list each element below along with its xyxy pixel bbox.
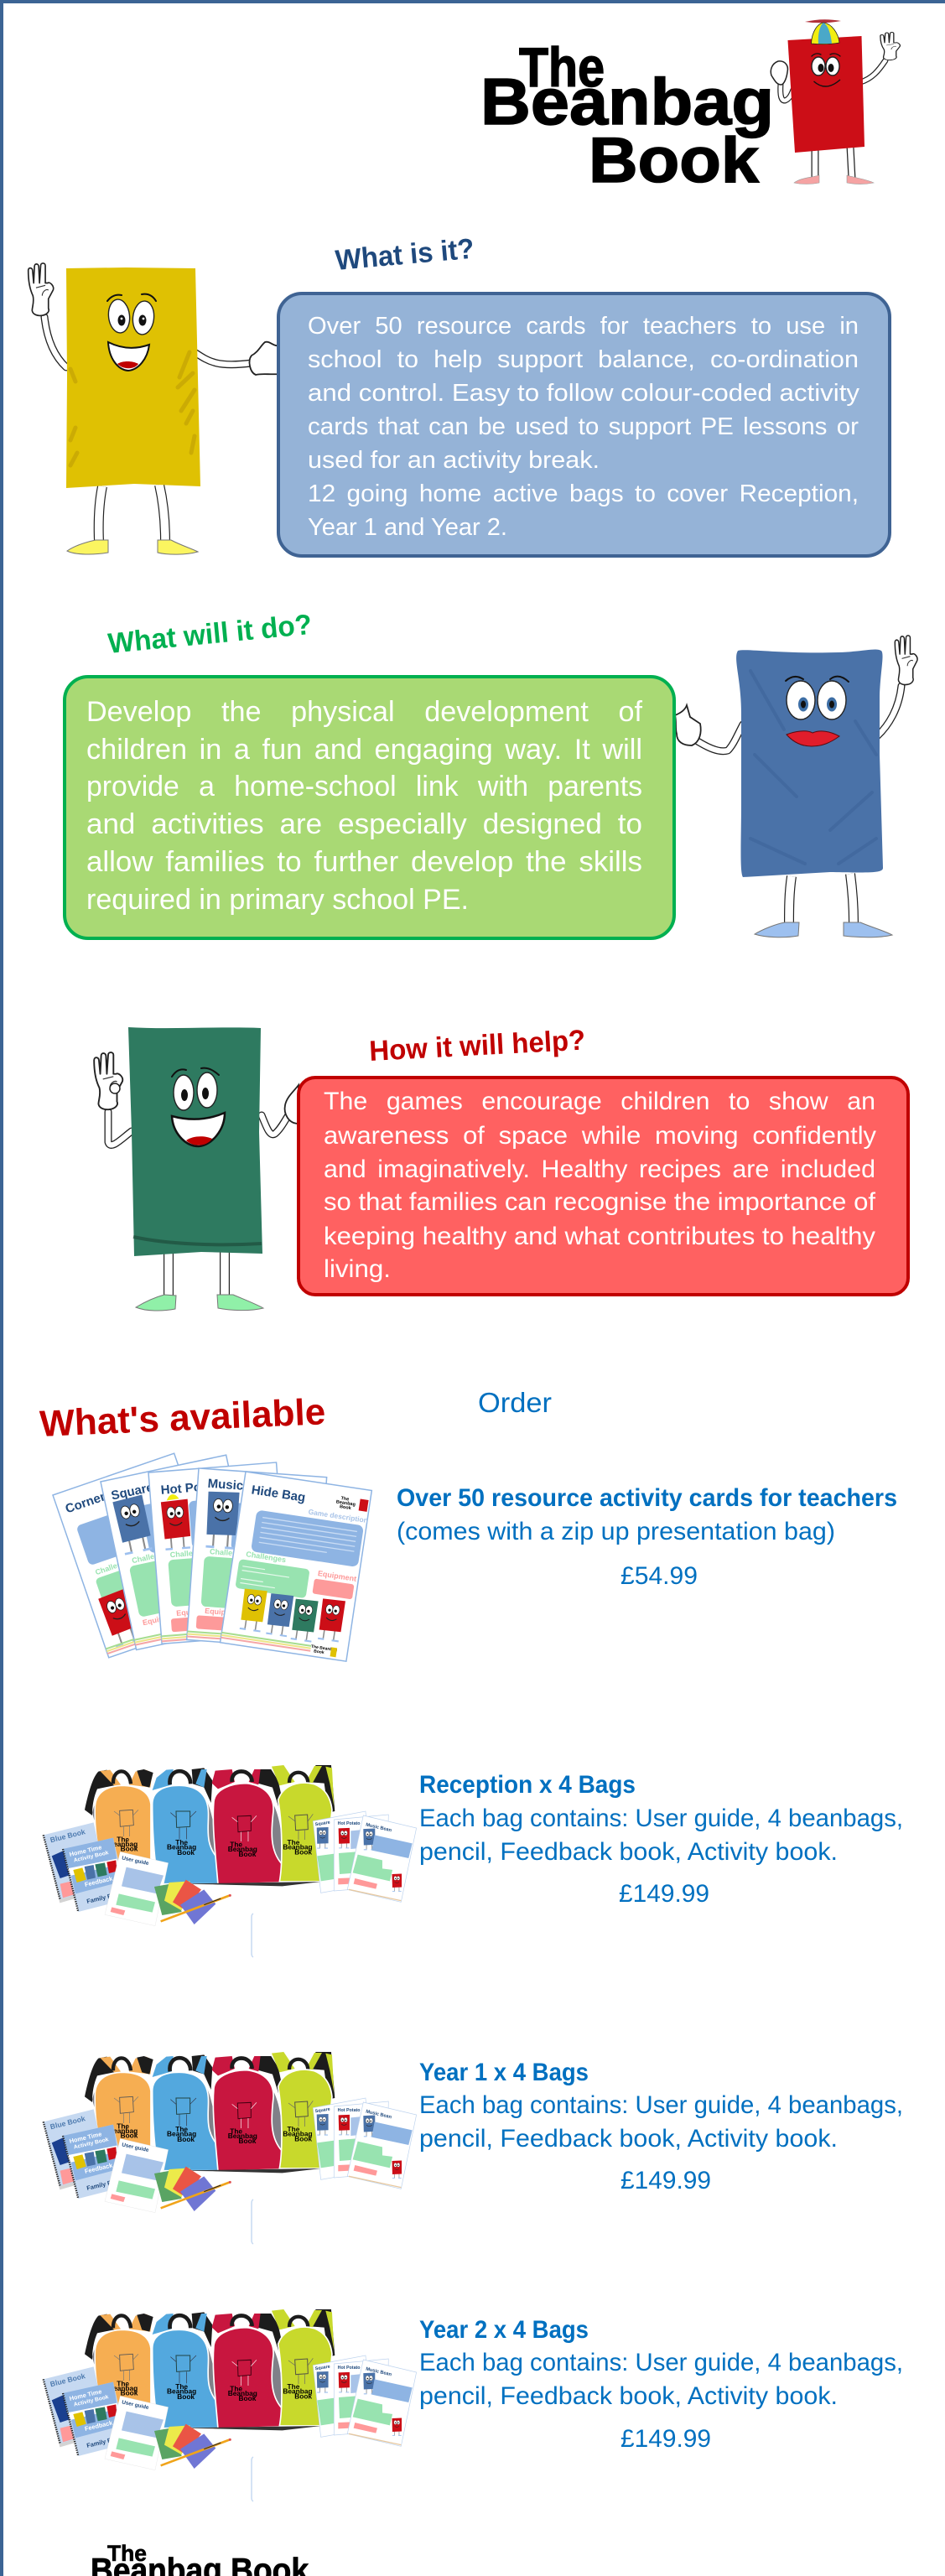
card: Square: Equipment	[142, 1611, 182, 1627]
text block: Year 2 bags: Year 2 x 4 Bags	[419, 2316, 589, 2344]
card: Corner: Challenges	[94, 1555, 135, 1576]
text block: Year 1 bags: Year 1 x 4 Bags	[419, 2059, 589, 2086]
text block: how it will help description: living.	[324, 1255, 391, 1283]
card: Hot Potato: Challenges	[169, 1548, 210, 1559]
text block: what is it description: Year 1 and Year 2.	[308, 514, 507, 541]
heading: What will it do?: What will it do?	[106, 609, 314, 660]
panel: how it will help	[299, 1078, 908, 1295]
illustration: Year 2 backpacks kit	[44, 2309, 417, 2470]
bracket mark	[252, 2457, 253, 2501]
text block: what is it description: Over 50 resource cards for teachers to use in	[308, 313, 859, 340]
panel: what is it	[278, 293, 890, 556]
card: Music: Equipment	[205, 1607, 244, 1618]
icon: red beanbag mascot with propeller hat	[771, 19, 900, 184]
heading: What is it?: What is it?	[334, 233, 475, 277]
illustration: Year 1 backpacks kit	[44, 2052, 417, 2213]
text block: what will it do description: Develop the physical development of	[86, 696, 643, 728]
logo: The Beanbag Book with red mascot	[480, 19, 900, 196]
logo wordmark: Beanbag	[480, 65, 774, 138]
card: Hide Bag: Challenges	[246, 1550, 287, 1564]
card: Music: Challenges	[210, 1547, 250, 1558]
text block: Reception bags: £149.99	[619, 1880, 709, 1908]
text block: what is it description: and control. Easy to follow colour-coded activity	[308, 380, 860, 407]
icon: blue beanbag character	[675, 636, 917, 937]
card: Hide Bag: Book	[340, 1504, 352, 1511]
footer logo: The Beanbag Book: The	[107, 2541, 147, 2566]
text block: Year 2 bags: Each bag contains: User guide, 4 beanbags,	[419, 2349, 903, 2376]
text block: how it will help description: so that families can recognise the importance of	[324, 1188, 876, 1216]
card: Hide Bag: The Beanbag	[311, 1644, 337, 1653]
text block: resource cards: Over 50 resource activity cards for teachers	[397, 1484, 897, 1512]
text block: what is it description: 12 going home active bags to cover Reception,	[308, 480, 859, 507]
card: Hide Bag: The	[340, 1496, 350, 1503]
text block: Reception bags: pencil, Feedback book, Activity book.	[419, 1838, 838, 1866]
text block: Year 1 bags: £149.99	[620, 2167, 711, 2194]
illustration: fan of activity cards	[53, 1453, 372, 1661]
icon: yellow beanbag character	[29, 263, 280, 554]
text block: resource cards	[397, 1484, 897, 1590]
text block: Reception bags: Reception x 4 Bags	[419, 1771, 636, 1799]
text block: what will it do description: provide a home-school link with parents	[86, 771, 642, 802]
logo wordmark	[480, 36, 774, 196]
panel: what will it do	[65, 677, 674, 938]
text block: resource cards: (comes with a zip up presentation bag)	[397, 1518, 835, 1545]
card: Hide Bag: Hide Bag	[251, 1483, 306, 1505]
card: Hot Potato	[148, 1462, 290, 1644]
text block: what will it do description	[86, 696, 643, 916]
footer logo: The Beanbag Book	[91, 2541, 309, 2576]
text block: Year 2 bags	[419, 2316, 903, 2453]
card: Hide Bag: Book	[314, 1649, 325, 1655]
card: Square: Challenges	[131, 1548, 172, 1565]
link: Order: Order	[478, 1387, 552, 1418]
text block: how it will help description	[324, 1088, 876, 1283]
logo wordmark: The	[519, 36, 605, 98]
text block: what will it do description: and activities are especially designed to	[86, 808, 642, 840]
logo wordmark: Book	[589, 125, 760, 196]
card: Hot Potato: Equipment	[176, 1606, 215, 1618]
card: Hide Bag: Game description	[308, 1508, 369, 1524]
icon: green beanbag character	[94, 1027, 299, 1311]
bracket mark	[252, 1914, 253, 1957]
text block: what is it description	[308, 313, 860, 541]
text block: what is it description: school to help support balance, co-ordination	[308, 346, 859, 373]
text block: what will it do description: allow families to further develop the skills	[86, 846, 642, 878]
text block: Reception bags: Each bag contains: User guide, 4 beanbags,	[419, 1805, 903, 1832]
text block: Year 2 bags: pencil, Feedback book, Activity book.	[419, 2382, 838, 2410]
text block: how it will help description: The games encourage children to show an	[324, 1088, 875, 1115]
text block: what is it description: used for an activity break.	[308, 447, 600, 474]
heading: How it will help?: How it will help?	[368, 1025, 586, 1067]
card: Music: Music Bean	[207, 1477, 278, 1496]
text block: Year 1 bags	[419, 2059, 903, 2194]
card: Square	[101, 1455, 262, 1650]
text block: Year 1 bags: Each bag contains: User guide, 4 beanbags,	[419, 2091, 903, 2119]
card: Corner	[53, 1453, 230, 1658]
text block: how it will help description: and imaginatively. Healthy recipes are included	[324, 1156, 875, 1183]
card: Square: Square	[110, 1480, 154, 1504]
text block: how it will help description: keeping healthy and what contributes to healthy	[324, 1223, 875, 1250]
text block: resource cards: £54.99	[620, 1562, 698, 1590]
card: Hide Bag: Equipment	[317, 1569, 357, 1583]
text block: Year 2 bags: £149.99	[620, 2425, 711, 2453]
heading: What's available: What's available	[39, 1391, 326, 1445]
card: Music	[187, 1468, 327, 1649]
bracket mark	[252, 2199, 253, 2244]
text block: Reception bags	[419, 1771, 903, 1908]
card: Hide Bag	[221, 1472, 372, 1661]
illustration: Reception backpacks kit	[44, 1765, 417, 1926]
card: Hide Bag: Beanbag	[335, 1499, 356, 1508]
text block: how it will help description: awareness of space while moving confidently	[324, 1122, 876, 1150]
text block: Year 1 bags: pencil, Feedback book, Activity book.	[419, 2125, 838, 2153]
text block: what will it do description: children in a fun and engaging way. It will	[86, 734, 642, 766]
card: Hot Potato: Hot Potato	[160, 1478, 225, 1498]
text block: what will it do description: required in primary school PE.	[86, 884, 469, 916]
text block: what is it description: cards that can be used to support PE lessons or	[308, 413, 859, 440]
card: Corner: Corner	[64, 1489, 107, 1516]
